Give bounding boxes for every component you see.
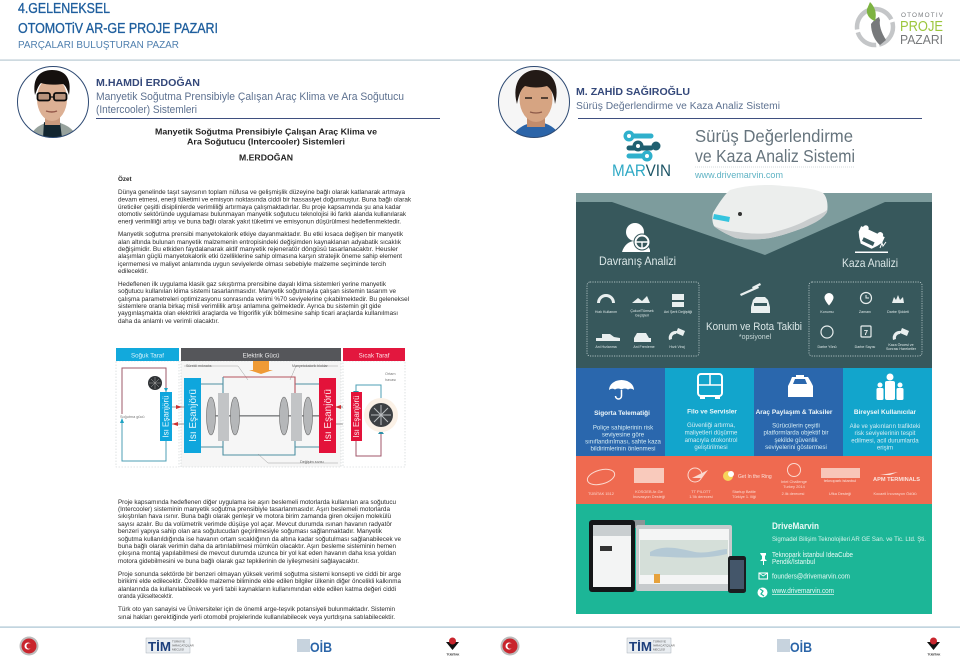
article heading: M.ERDOĞAN (239, 152, 293, 162)
article heading: Manyetik Soğutma Prensibiyle Çalışan Araç Klima ve (155, 128, 377, 136)
diagram: magnetic cooling system (116, 348, 405, 467)
box: behaviour metrics: Çukur/Tümsek (630, 309, 654, 313)
section: Kaza Analizi: Kaza Analizi (842, 256, 898, 270)
article text: continuation: sayısı azalır. Bu da volümetrik verimde düşüşe yol açar. Mevcut durumda ısınan havanın radyatör (118, 521, 392, 528)
speaker heading: Sağıroğlu (576, 85, 780, 112)
article heading: Ara Soğutucu (Intercooler) Sistemleri (187, 138, 345, 146)
box: crash metrics: Zamanı (859, 310, 871, 314)
logo: TİM: TİM (629, 639, 652, 654)
article text: continuation: benzeri yapıya sahip olan ara soğutucudan geçirilmesiyle soğuması sağlanmaktadır. Manyetik (118, 528, 383, 535)
article text: Özet (118, 174, 412, 325)
logo: Intel Challenge Turkey 2014 (781, 464, 807, 489)
diagram panel: cold side (116, 348, 179, 467)
article text: continuation: sınai hakları gerektiğinde yerli otomobil projelerinde kullanılabilecek veya yurtdışına satılabilecektir. (118, 614, 395, 621)
box: crash metrics: Darbe Şiddeti (887, 310, 909, 314)
box: behaviour metrics: Ani Frenleme (633, 345, 655, 349)
article text: Özet: daha da anlamlı ve verimli olacaktır. (118, 318, 219, 325)
logo: TİM: TÜRKİYE (653, 638, 666, 644)
address (760, 550, 853, 566)
article text: Özet: devam etmesi, enerji tüketimi ve emisyon noktasında ciddi bir hassasiyet doğurmuştur. Buna bağlı olarak (118, 196, 412, 204)
logo: TİM: TÜRKİYE (172, 638, 185, 644)
speaker heading: Erdoğan (96, 76, 404, 116)
product heading: ve Kaza Analiz Sistemi (695, 146, 855, 166)
panel: awards and partners: 2.lik derecesi (782, 491, 804, 496)
panel: awards and partners: KOSGEB Ar-Ge (635, 489, 663, 494)
article text: continuation: soğutma kullanıldığında ise havanın ortam sıcaklığının da altına kadar soğutulması sağlanabilecek ve (118, 536, 401, 543)
address: Teknopark İstanbul IdeaCube (772, 550, 853, 559)
diagram panel: electric power core: Isı Eşanjörü (188, 389, 199, 442)
panel: Bireysel Kullanıcılar (843, 368, 932, 456)
product heading: www.drivemarvin.com (694, 170, 783, 181)
article text: Özet: alan altında bulunan manyetik malzemenin entropisindeki değişimden kaynaklanan adyabatik sıcaklık (118, 239, 402, 246)
article heading (155, 128, 377, 162)
website (758, 588, 834, 598)
panel: Sigorta Telematiği: sınıflandırılması, sahte kaza (585, 438, 662, 446)
box: crash metrics: Darbe Sayısı (855, 345, 875, 349)
speaker heading: Erdoğan: (Intercooler) Sistemleri (96, 104, 197, 116)
company details: DriveMarvin (772, 521, 819, 532)
portrait: M. Zahid Sağıroğlu (498, 66, 570, 140)
box: behaviour metrics: Hızlı Kullanım (595, 310, 617, 314)
logo: APM Terminals (873, 472, 920, 483)
logo: Otomotiv Proje Pazarı: OTOMOTIV (901, 12, 944, 19)
logo: Tübitak: TÜBİTAK (928, 652, 941, 656)
box: behaviour metrics: Geçişleri (635, 314, 649, 318)
logo: APM Terminals: APM TERMINALS (873, 477, 920, 483)
company details: Sigmadel Bilişim Teknolojileri AR GE San. ve Tic. Ltd. Şti. (772, 536, 926, 543)
emblem: Turkey (20, 636, 38, 656)
panel: Araç Paylaşım & Taksiler: Sürücülerin çeşitli (772, 422, 820, 430)
logo: Intel Challenge Turkey 2014: Turkey 2014 (783, 484, 806, 489)
logo: Tübitak: TÜBİTAK (447, 652, 460, 656)
box: behaviour metrics: Hızlı Viraj (669, 345, 685, 349)
article text: continuation: Proje sonunda sektörde bir benzeri olmayan yüksek verimli soğutma sistemi konsepti ve ciddi bir arge (118, 571, 401, 578)
logo: TİM (627, 638, 676, 654)
panel: Filo ve Servisler: Filo ve Servisler (687, 408, 737, 416)
panel: Bireysel Kullanıcılar: Aile ve yakınların trafikteki (850, 423, 920, 430)
speaker heading: Sağıroğlu: Sürüş Değerlendirme ve Kaza Analiz Sistemi (576, 101, 780, 112)
panel: Sigorta Telematiği (576, 368, 665, 456)
logo: Kosgeb (634, 468, 664, 483)
panel: Araç Paylaşım & Taksiler: Araç Paylaşım & Taksiler (756, 409, 833, 416)
panel: awards and partners: Türkiye 1. lliği (732, 494, 756, 499)
section: Kaza Analizi (842, 223, 898, 270)
panel: awards and partners: Ufka Desteği (829, 491, 851, 496)
panel: awards and partners: Kocaeli İnovasyon Ödülü (873, 491, 917, 496)
logo: Marvin (612, 130, 671, 180)
section: Davranış Analizi: Davranış Analizi (599, 254, 676, 268)
logo: OİB: OİB (310, 639, 332, 655)
panel: Bireysel Kullanıcılar: Bireysel Kullanıcılar (854, 409, 917, 416)
address: Pendik/İstanbul (772, 557, 815, 566)
diagram panel: electric power core: Elektrik Gücü (243, 352, 280, 360)
logo: Tübitak 1512 (586, 467, 616, 487)
logo: Get In the Ring (723, 471, 772, 481)
speaker heading: Sağıroğlu: M. ZAHİD SAĞIROĞLU (576, 85, 690, 98)
logo: Teknopark Istanbul (821, 468, 860, 483)
diagram panel: hot side (343, 348, 405, 467)
devices mockup (589, 520, 746, 593)
logo: Otomotiv Proje Pazarı: PROJE (900, 18, 943, 35)
article text: continuation: birikimi elde edilecektir. Özellikle malzeme biliminde elde edilen bilgiler ülkenin diğer öncelikli kalkınma (118, 577, 401, 585)
product heading (694, 126, 855, 181)
box: crash metrics: Darbe Yönü (817, 345, 837, 349)
diagram panel: electric power core: Değişim sıvısı (300, 460, 324, 464)
box: crash metrics: Konumu (820, 310, 834, 314)
panel: Filo ve Servisler: amacıyla otokontrol (685, 437, 737, 444)
title (18, 0, 218, 37)
box: crash metrics: 7 (864, 328, 868, 337)
logo: TİM: TİM (148, 639, 171, 654)
logo: TİM: MECLİSİ (172, 646, 184, 652)
article text: Özet: içermemesi ve maliyet anlamında uygun seviyelerde olması sebebiyle malzeme seçiminde tercih (118, 261, 386, 268)
panel: Sigorta Telematiği: Sigorta Telematiği (594, 410, 650, 417)
diagram panel: hot side: Ortam (385, 372, 396, 376)
section: Konum ve Rota Takibi: *opsiyonel (739, 334, 772, 341)
panel: product analysis (576, 185, 932, 368)
article text: Özet: Özet (118, 174, 133, 183)
article text: Özet: alaşımları güçlü manyetokalorik etki özelliklerine sahip olmasına karşın stratejik öneme sahip element (118, 253, 402, 260)
article text: continuation: Proje kapsamında hedeflenen diğer uygulama ise aşırı beslemeli motorlarda kullanılan ara soğutucu (118, 499, 396, 506)
product heading: Sürüş Değerlendirme (695, 126, 853, 146)
logo: Otomotiv Proje Pazarı: PAZARI (900, 32, 943, 47)
panel: Bireysel Kullanıcılar: risk seviyelerinin tespit (855, 430, 916, 437)
logo: Tübitak (446, 638, 460, 656)
speaker heading: Erdoğan: Manyetik Soğutma Prensibiyle Çalışan Araç Klima ve Ara Soğutucu (96, 91, 404, 103)
footer logos: right page (500, 636, 941, 656)
diagram panel: cold side: Isı Eşanjörü (162, 395, 170, 438)
article text: Özet: sistemlere oranla birkaç misli verimlilik artışı anlamına gelmektedir. Ayrıca bu sistemin git gide (118, 303, 381, 310)
panel: Sigorta Telematiği: bildirimlerinin önlenmesi (590, 446, 656, 452)
article text: continuation: sıkıştırılan hava ısınır. Buna bağlı olarak genleşir ve motora birim zamanda giren oksijen molekülü (118, 513, 391, 520)
article text: continuation (118, 499, 401, 621)
article text: continuation: (Intercooler) sisteminin manyetik soğutma prensibiyle tasarlanmasıdır. Aşırı beslemeli motorlarda (118, 506, 390, 513)
article text: Özet: değişimidir. Bu etkiden faydalanarak aktif manyetik rejeneratör döngüsü tasarlanacaktır. Heusler (118, 246, 398, 253)
panel: Filo ve Servisler (665, 368, 754, 456)
article text: continuation: alanlarında da kullanılabilecek ve yerli tabii kaynakların kullanımından elde edilen katma değeri ciddi (118, 586, 396, 593)
logo: OİB (777, 639, 812, 655)
company details (772, 521, 926, 543)
panel: awards and partners (576, 456, 932, 504)
panel: Araç Paylaşım & Taksiler: şekilde güvenlik (774, 437, 818, 444)
article text: Özet: edilecektir. (118, 268, 148, 275)
article text: Özet: soğutucu kullanılan klima sistemi tasarlanmasıdır. Manyetik soğutmayla çalışan sistemin tasarım ve (118, 288, 396, 295)
panel: Bireysel Kullanıcılar: edilmesi, acil durumlarda (851, 438, 919, 444)
emblem: Turkey (500, 636, 520, 656)
panel: Araç Paylaşım & Taksiler: platformlarda objektif bir (763, 430, 829, 436)
title: OTOMOTiV AR-GE PROJE PAZARI (18, 20, 218, 37)
article text: continuation: motora gidebilmesini ve buna bağlı olarak gaz tepkilerinin de iyileşmesini sağlayacaktır. (118, 558, 359, 565)
email: founders@drivemarvin.com (772, 574, 850, 580)
panel: awards and partners: Startup Battle (732, 489, 756, 494)
logo: TİM (146, 638, 195, 654)
logo: TİM: İHRACATÇILAR (653, 642, 676, 648)
article text: continuation: oranda yükseltecektir. (118, 593, 173, 600)
article text: Özet: Dünya genelinde taşıt sayısının toplam nüfusa ve gelişmişlik düzeyine bağlı olarak katlanarak artmaya (118, 189, 406, 196)
article text: Özet: çalışma parametreleri optimizasyonu sonrasında verimi %70 seviyelerine çıkabilmektedir. Bu geleneksel (118, 296, 409, 303)
section: Davranış Analizi (599, 223, 676, 268)
logo: Intel Challenge Turkey 2014: Intel Challenge (781, 479, 807, 484)
panel: awards and partners: 1.'lik derecesi (689, 494, 713, 499)
article text: Özet: üreticiler çeşitli disiplinlerde verimliliği artırmaya çalışmaktadırlar. Bu proje kapsamında şu ana kadar (118, 204, 401, 211)
logo: Otomotiv Proje Pazarı (857, 2, 944, 47)
diagram panel: hot side: Sıcak Taraf (359, 352, 390, 360)
logo: TİM: İHRACATÇILAR (172, 642, 195, 648)
panel: Filo ve Servisler: maliyetleri düşürme (685, 430, 738, 436)
section: Konum ve Rota Takibi (706, 283, 802, 341)
device: Marvin tracker (712, 185, 828, 240)
panel: awards and partners: TÜBİTAK 1512 (588, 491, 614, 496)
diagram panel: hot side: havası (385, 378, 396, 382)
diagram panel: cold side: Soğuk Taraf (131, 352, 164, 360)
box: crash metrics: Sonrası Hareketler (886, 347, 917, 351)
diagram panel: electric power core (181, 348, 341, 467)
logo: TT Pilott (688, 468, 708, 482)
panel: Araç Paylaşım & Taksiler: seviyelerini göstermesi (765, 444, 827, 451)
diagram panel: electric power core: Manyetokalorik bloklar (292, 364, 329, 368)
logo: Get In the Ring: Get In the Ring (738, 474, 772, 480)
panel: Bireysel Kullanıcılar: erişim (877, 444, 893, 452)
diagram panel: electric power core: Sürekli mıknatıs (186, 364, 212, 368)
diagram panel: cold side: Soğutma gücü (120, 415, 144, 419)
box: behaviour metrics: Ani Hızlanma (595, 345, 617, 349)
article text: Özet: enerji verimliliği artışı ve buna bağlı olarak yakıt tüketimi ve emisyonun düşürülmesi hedeflenmektedir. (118, 218, 401, 226)
subtitle: PARÇALARI BULUŞTURAN PAZAR (18, 40, 179, 51)
box: crash metrics (809, 282, 922, 356)
box: behaviour metrics: Ani Şerit Değiştiği (664, 310, 692, 314)
panel: contact (576, 504, 932, 614)
panel: Araç Paylaşım & Taksiler (754, 368, 843, 456)
logo: OİB: OİB (790, 639, 812, 655)
logo: Teknopark Istanbul: teknopark istanbul (824, 478, 856, 483)
website: www.drivemarvin.com (771, 588, 834, 595)
logo: TİM: MECLİSİ (653, 646, 665, 652)
panel: Sigorta Telematiği: seviyesine göre (602, 432, 645, 438)
article text: continuation: çıkışına montaj yapılabilmesi de mevcut durumda uzunca bir yol kat eden havanın daha kısa yoldan (118, 550, 396, 557)
panel: awards and partners: İnovasyon Desteği (633, 494, 665, 499)
panel: awards and partners: TT PILOTT (691, 489, 711, 494)
article text: Özet: yaygınlaşmakta olan elektrikli araçlarda ve frigorifik yük bölmesine sahip ticari araçlarda kullanılması (118, 310, 398, 317)
portrait: M. Hamdi Erdoğan (18, 66, 88, 140)
panel: Filo ve Servisler: geliştirilmesi (694, 444, 728, 451)
article text: continuation: buna bağlı olarak verimin daha da artırılabilmesi mümkün olacaktır. Aşırı besleme sisteminin hemen (118, 543, 396, 550)
box: behaviour metrics (587, 282, 699, 356)
section: Konum ve Rota Takibi: Konum ve Rota Takibi (706, 321, 802, 333)
panel: Sigorta Telematiği: Poliçe sahiplerinin risk (593, 424, 654, 432)
footer logos: left page (20, 636, 460, 656)
diagram panel: electric power core: Isı Eşanjörü (323, 389, 334, 442)
title: 4.GELENEKSEL (18, 0, 110, 17)
logo: Marvin: MARVIN (612, 161, 671, 180)
article text: Özet: Hedeflenen ilk uygulama klasik gaz sıkıştırma prensibine dayalı klima sistemleri yerine manyetik (118, 281, 387, 288)
article text: Özet: otomotiv sektöründe uygulaması bulunmayan manyetik soğutucu teknolojisi iki farklı alanda kullanılarak (118, 211, 407, 218)
diagram panel: hot side: Isı Eşanjörü (352, 395, 361, 438)
panel: Filo ve Servisler: Güvenliği artırma, (687, 422, 735, 429)
article text: Özet: Manyetik soğutma prensibi manyetokalorik etkiye dayanmaktadır. Bu etki kısaca değişen bir manyetik (118, 231, 404, 238)
logo: OİB (297, 639, 332, 655)
icon: gauge (597, 294, 615, 303)
speaker heading: Erdoğan: M.HAMDİ ERDOĞAN (96, 76, 200, 89)
article text: continuation: Türk oto yan sanayisi ve Üniversiteler için de önemli arge-teşvik potansiyeli bulunmaktadır. Sistemin (118, 605, 395, 613)
box: crash metrics: Kaza Öncesi ve (888, 343, 914, 347)
logo: Tübitak (927, 638, 941, 656)
